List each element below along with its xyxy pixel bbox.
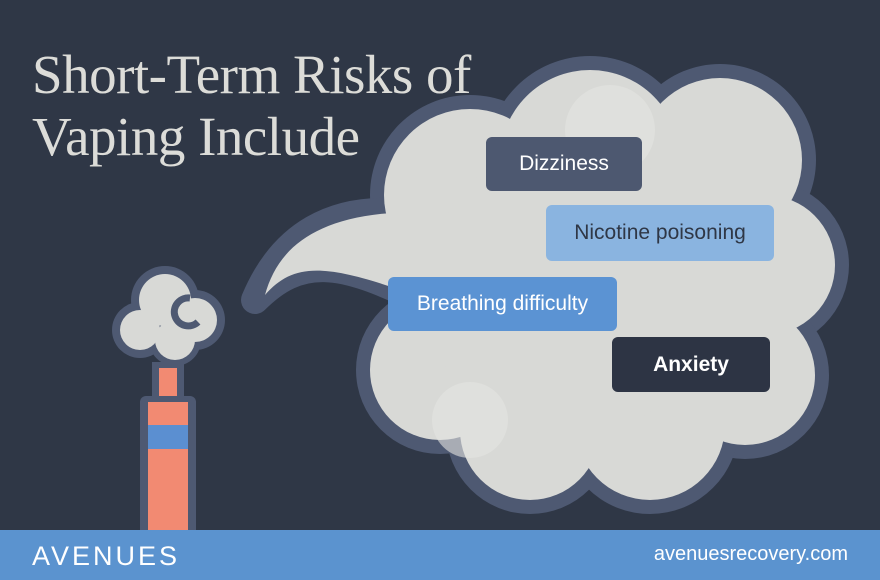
- box: Nicotine poisoning: Nicotine poisoning: [574, 221, 746, 244]
- title: Vaping Include: [32, 106, 360, 167]
- box: Anxiety: Anxiety: [653, 352, 729, 376]
- box: Dizziness: Dizziness: [519, 152, 609, 175]
- logo: AVENUES: [32, 541, 180, 571]
- box: Dizziness: [486, 137, 642, 191]
- title: Short-Term Risks of: [32, 44, 471, 105]
- box: Breathing difficulty: Breathing difficulty: [417, 292, 588, 315]
- box: Nicotine poisoning: [546, 205, 774, 261]
- box: Anxiety: [612, 337, 770, 392]
- box: Breathing difficulty: [388, 277, 617, 331]
- url: avenuesrecovery.com: [654, 543, 848, 565]
- small vape cloud: [112, 266, 225, 366]
- cloud: [255, 56, 849, 514]
- title: [32, 44, 472, 167]
- vape device: [140, 362, 196, 536]
- footer bar: [0, 530, 880, 580]
